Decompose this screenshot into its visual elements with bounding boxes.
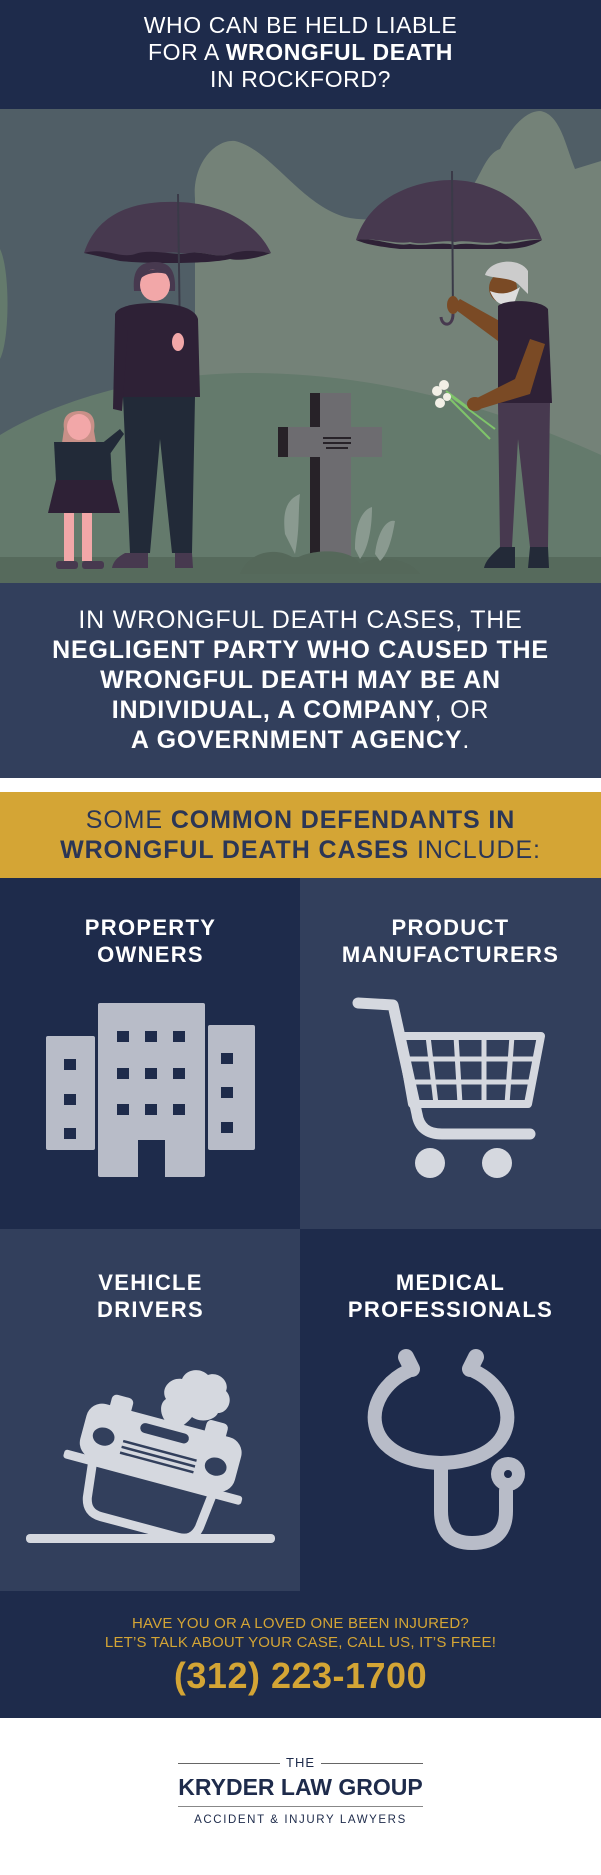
section heading: WRONGFUL DEATH CASES INCLUDE:: [60, 836, 541, 864]
title: FOR A WRONGFUL DEATH: [148, 39, 453, 65]
CTA text: [105, 1615, 496, 1651]
title: WHO CAN BE HELD LIABLE: [144, 12, 457, 38]
phone number: (312) 223-1700: [174, 1655, 427, 1696]
heading: property owners: OWNERS: [97, 942, 204, 967]
illustration: mourners at grave: [0, 109, 601, 583]
intro text: INDIVIDUAL, A COMPANY, OR: [112, 696, 489, 724]
girl: [48, 411, 124, 569]
panel: product manufacturers: [300, 878, 601, 1229]
icon: buildings: [46, 1003, 255, 1177]
heading: product manufacturers: [342, 915, 559, 967]
CTA text: LET’S TALK ABOUT YOUR CASE, CALL US, IT’S FREE!: [105, 1634, 496, 1651]
panel: vehicle drivers: [0, 1229, 301, 1591]
heading: product manufacturers: MANUFACTURERS: [342, 942, 559, 967]
grave cross: [240, 393, 420, 574]
intro text: A GOVERNMENT AGENCY.: [131, 726, 470, 754]
icon: shopping cart: [352, 998, 545, 1178]
logo: [178, 1755, 423, 1826]
logo: THE: [286, 1755, 315, 1770]
logo: KRYDER LAW GROUP: [178, 1774, 423, 1800]
heading: medical professionals: [348, 1270, 553, 1322]
heading: vehicle drivers: DRIVERS: [97, 1297, 204, 1322]
man with umbrella and flowers: [356, 171, 552, 568]
heading: property owners: PROPERTY: [85, 915, 216, 940]
woman with umbrella: [84, 194, 271, 568]
panel: medical professionals: [300, 1229, 601, 1591]
title: [144, 12, 457, 92]
heading: vehicle drivers: [97, 1270, 204, 1322]
intro text: [52, 606, 549, 754]
heading: product manufacturers: PRODUCT: [392, 915, 509, 940]
title: IN ROCKFORD?: [210, 66, 391, 92]
heading: medical professionals: PROFESSIONALS: [348, 1297, 553, 1322]
heading: property owners: [85, 915, 216, 967]
logo: ACCIDENT & INJURY LAWYERS: [194, 1814, 407, 1826]
heading: medical professionals: MEDICAL: [396, 1270, 505, 1295]
section heading: [60, 806, 541, 864]
intro text: IN WRONGFUL DEATH CASES, THE: [78, 606, 523, 634]
title bar: [0, 0, 601, 109]
CTA panel: [0, 1591, 601, 1718]
section heading: SOME COMMON DEFENDANTS IN: [86, 806, 515, 834]
intro text: WRONGFUL DEATH MAY BE AN: [100, 666, 501, 694]
icon: overturned car: [26, 1370, 275, 1543]
heading: vehicle drivers: VEHICLE: [98, 1270, 203, 1295]
panel: property owners: [0, 878, 301, 1229]
icon: stethoscope: [368, 1349, 525, 1550]
intro text panel: [0, 583, 601, 778]
CTA text: HAVE YOU OR A LOVED ONE BEEN INJURED?: [132, 1615, 469, 1632]
intro text: NEGLIGENT PARTY WHO CAUSED THE: [52, 636, 549, 664]
gold heading band: [0, 792, 601, 878]
